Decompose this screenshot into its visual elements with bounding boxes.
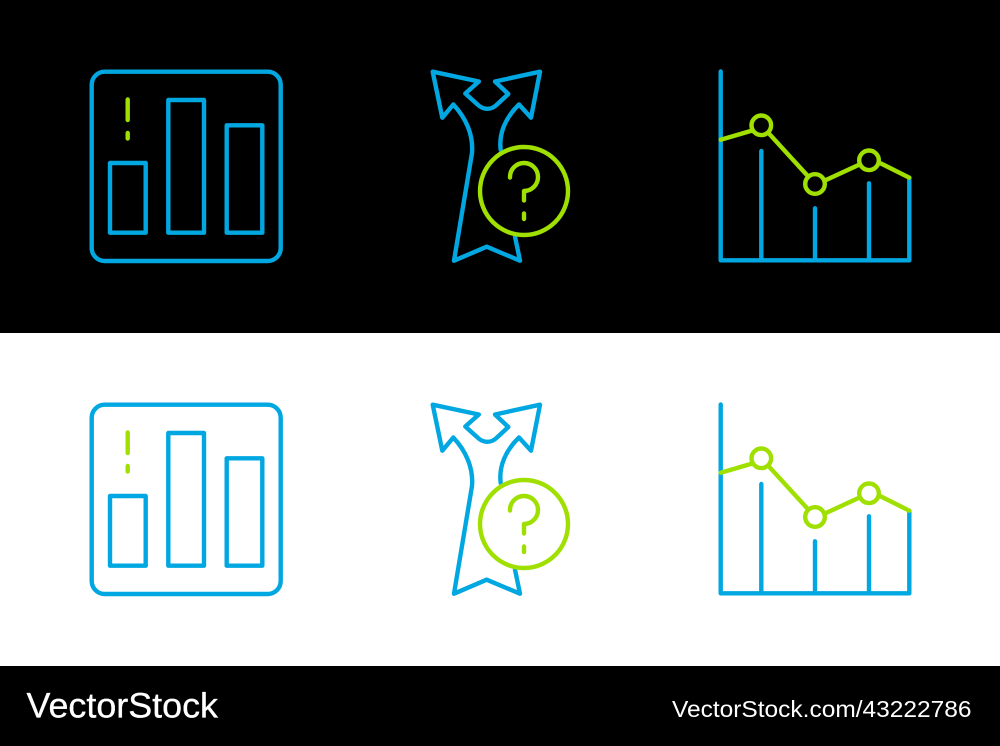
icon: bar chart with exclamation, top bbox=[92, 72, 281, 261]
icon: forked arrow with question mark, top bbox=[433, 72, 568, 261]
icon: declining line chart, top bbox=[721, 72, 909, 260]
footer image id: VectorStock.com/43222786 bbox=[672, 696, 972, 722]
panel: black top background bbox=[0, 0, 1000, 333]
footer logo: VectorStock: VectorStock bbox=[26, 686, 219, 725]
panel: white middle background bbox=[0, 333, 1000, 666]
icon: bar chart with exclamation, bottom bbox=[92, 405, 281, 594]
icon: declining line chart, bottom bbox=[721, 404, 909, 593]
icon: forked arrow with question mark, bottom bbox=[433, 405, 568, 594]
panel: black footer background bbox=[0, 666, 1000, 746]
